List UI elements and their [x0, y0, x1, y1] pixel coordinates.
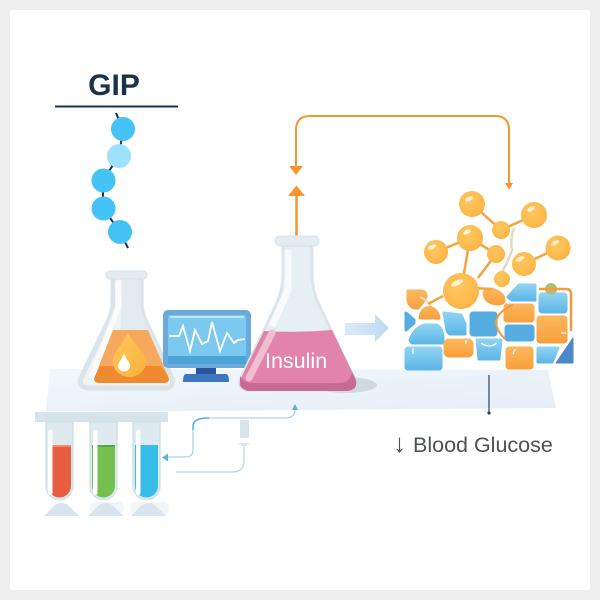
peptide chain: [92, 113, 135, 248]
cell tissue: [406, 283, 573, 369]
icon: drop: [113, 332, 146, 377]
test tube: red: [44, 422, 79, 516]
floor shadow: [313, 377, 377, 393]
label: blood glucose: Blood Glucose: [413, 433, 553, 457]
label: blood glucose: ↓: [393, 428, 406, 458]
monitor: [163, 310, 251, 382]
test tube rack: [35, 412, 168, 422]
test tube: blue: [130, 422, 169, 516]
connector tube: [176, 420, 250, 472]
glucose pointer: [487, 375, 491, 415]
feedback loop arrow: [289, 116, 513, 190]
platform: [46, 369, 556, 411]
insulin secretion arrow: [288, 186, 305, 237]
chart: heartbeat line: [169, 322, 245, 351]
blue feedback arrow: [162, 404, 298, 462]
flask: insulin: [240, 236, 356, 391]
small cell details: [413, 333, 566, 354]
test tube: green: [88, 422, 124, 516]
flask: orange: [80, 271, 173, 388]
label: Insulin: Insulin: [265, 349, 327, 373]
molecule network: [424, 191, 570, 309]
flow arrow to cells: [345, 314, 389, 342]
heading rule: [55, 106, 178, 108]
heading: GIP: GIP: [88, 69, 140, 102]
